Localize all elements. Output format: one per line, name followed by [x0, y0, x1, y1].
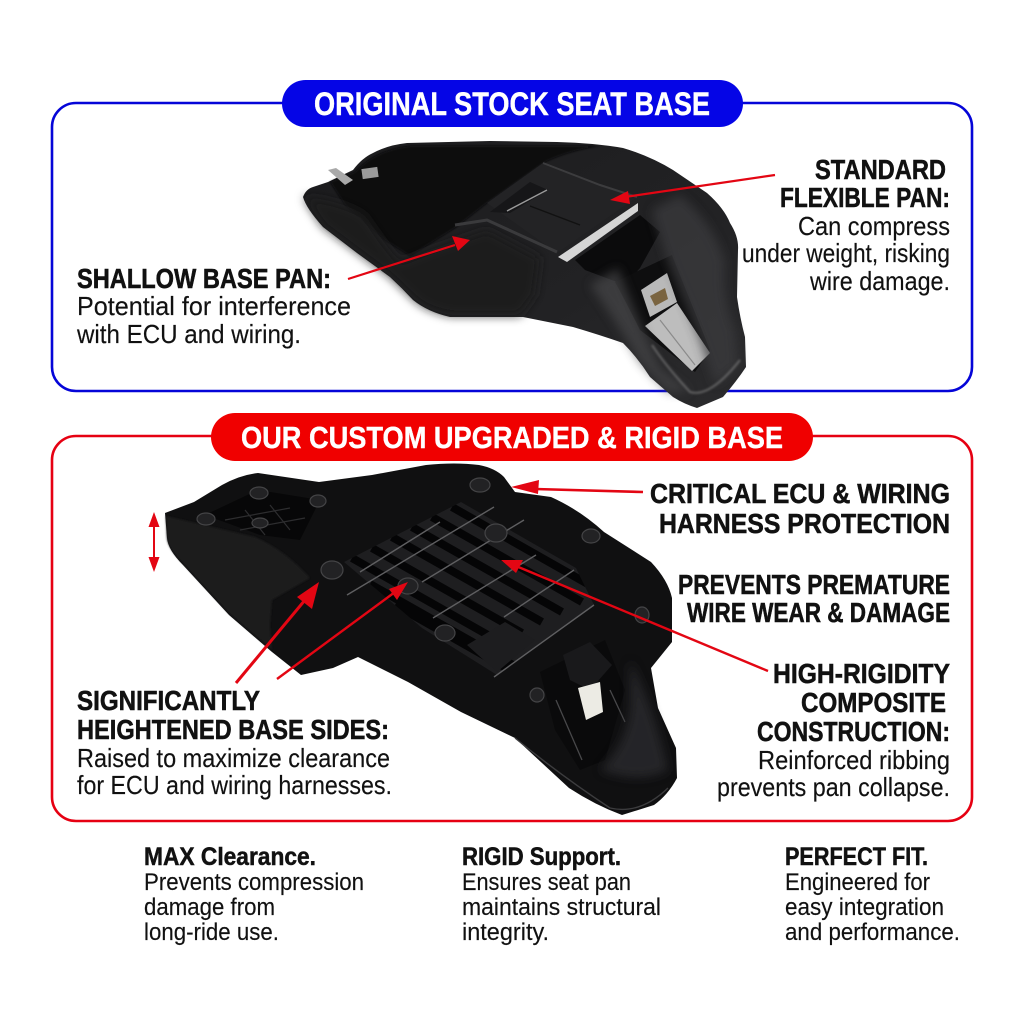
benefit: max clearance: [144, 843, 364, 946]
heading: original stock seat base: ORIGINAL STOCK SEAT BASE: [314, 86, 710, 122]
callout: critical ECU and wiring harness protection: CRITICAL ECU & WIRING: [650, 478, 950, 509]
callout: prevents premature wear: WIRE WEAR & DAMAGE: [687, 597, 950, 628]
callout: significantly heightened base sides: SIGNIFICANTLY: [77, 685, 260, 716]
arrow: standard flexible pan: [610, 175, 775, 204]
callout: shallow base pan: [76, 263, 351, 349]
arrow: high-rigidity composite: [501, 560, 768, 671]
callout: standard flexible pan: under weight, risking: [742, 238, 950, 268]
callout: high-rigidity composite construction: CONSTRUCTION:: [757, 716, 950, 747]
callout: high-rigidity composite construction: prevents pan collapse.: [717, 772, 950, 802]
arrow: heightened side front: [277, 582, 408, 679]
glossy nose: [600, 660, 668, 778]
benefit: rigid support: [462, 843, 661, 946]
callout: standard flexible pan: wire damage.: [809, 266, 950, 296]
callout: high-rigidity composite construction: COMPOSITE: [801, 687, 946, 718]
arrow: critical ECU protection: [511, 480, 643, 494]
tail recess: [575, 215, 660, 285]
connector recess: [540, 640, 625, 770]
main pan and ribbing: [344, 502, 594, 675]
callout: significantly heightened base sides: Raised to maximize clearance: [77, 743, 390, 773]
arrow: shallow base pan: [348, 236, 470, 279]
side wall panel: [166, 516, 310, 650]
benefit: perfect fit: easy integration: [785, 894, 944, 921]
white strip: [558, 203, 638, 262]
callout: shallow base pan: with ECU and wiring.: [76, 319, 301, 349]
callout: significantly heightened base sides: for ECU and wiring harnesses.: [77, 770, 392, 800]
callout: critical ECU and wiring harness protection: HARNESS PROTECTION: [659, 508, 950, 539]
photo: stock seat underside: [303, 141, 746, 408]
arrow: heightened side rear: [236, 582, 319, 683]
benefit: rigid support: integrity.: [462, 919, 549, 946]
benefit: max clearance: Prevents compression: [144, 869, 364, 896]
callout: high-rigidity composite construction: [717, 658, 950, 802]
callout: critical ECU and wiring harness protection: [650, 478, 950, 539]
latch: [641, 273, 677, 317]
metal plate: [645, 303, 710, 371]
callout: shallow base pan: SHALLOW BASE PAN:: [77, 263, 331, 294]
panel: custom upgraded base: [52, 436, 972, 821]
benefit: rigid support: Ensures seat pan: [462, 869, 631, 896]
callout: standard flexible pan: STANDARD: [815, 154, 946, 185]
callout: significantly heightened base sides: HEIGHTENED BASE SIDES:: [77, 714, 389, 745]
rectangular pad: [467, 622, 535, 672]
rear pan: [205, 490, 320, 540]
benefit: max clearance: damage from: [144, 894, 275, 921]
icon: height double arrow: [148, 512, 160, 572]
heading: custom upgraded and rigid base: [211, 413, 813, 461]
mounting bosses: [197, 478, 649, 702]
callout: shallow base pan: Potential for interference: [77, 291, 351, 321]
recessed pan: [487, 163, 637, 253]
benefit: perfect fit: Engineered for: [785, 869, 930, 896]
benefit: perfect fit: [785, 843, 960, 946]
callout: high-rigidity composite construction: Reinforced ribbing: [758, 745, 950, 775]
benefit: perfect fit: and performance.: [785, 919, 960, 946]
callout: standard flexible pan: FLEXIBLE PAN:: [780, 182, 950, 213]
glossy wear: [652, 195, 738, 385]
benefit: perfect fit: PERFECT FIT.: [785, 843, 928, 871]
cavity shading: [330, 146, 600, 256]
clip and tab: [328, 168, 353, 185]
benefit: rigid support: maintains structural: [462, 894, 661, 921]
callout: significantly heightened base sides: [77, 685, 392, 800]
heading: original stock seat base: [282, 80, 743, 127]
callout: standard flexible pan: Can compress: [798, 211, 950, 241]
benefit: rigid support: RIGID Support.: [462, 843, 621, 871]
callout: high-rigidity composite construction: HIGH-RIGIDITY: [773, 658, 950, 689]
photo: upgraded seat underside: [165, 464, 677, 815]
panel: original stock seat base: [52, 103, 972, 391]
benefit: max clearance: MAX Clearance.: [144, 843, 316, 871]
callout: prevents premature wear: [678, 569, 950, 628]
callout: standard flexible pan: [742, 154, 950, 296]
callout: prevents premature wear: PREVENTS PREMATURE: [678, 569, 950, 600]
heading: custom upgraded and rigid base: OUR CUSTOM UPGRADED & RIGID BASE: [241, 420, 783, 455]
benefit: max clearance: long-ride use.: [144, 919, 279, 946]
